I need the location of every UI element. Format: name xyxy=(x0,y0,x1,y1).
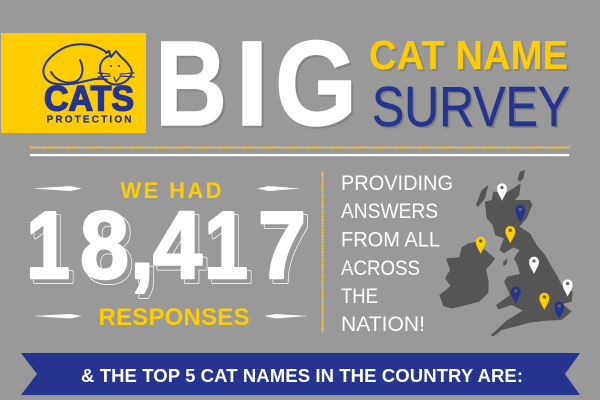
we had label: WE HAD xyxy=(120,178,222,203)
title: BIG xyxy=(155,15,359,153)
text: providing answers: ANSWERS xyxy=(341,199,438,223)
map pins xyxy=(476,183,573,319)
response count: 1 xyxy=(204,192,248,299)
title: BIG: I xyxy=(235,15,269,151)
response count: 4 xyxy=(153,192,202,299)
response count: 7 xyxy=(262,196,310,303)
text: providing answers: FROM ALL xyxy=(341,228,440,252)
banner xyxy=(21,353,580,395)
response count: 1 xyxy=(26,192,70,299)
response count: 1 xyxy=(208,196,252,303)
response count: 1 xyxy=(30,196,74,303)
solid divider xyxy=(30,154,569,156)
response count: 7 xyxy=(262,196,310,303)
response count: 1 xyxy=(30,196,74,303)
title: CAT NAME: CAT NAME xyxy=(371,34,570,80)
vertical dotted divider xyxy=(322,172,324,332)
title: CAT NAME: CAT NAME xyxy=(369,32,568,78)
dotted divider xyxy=(30,146,570,148)
response count: , xyxy=(134,196,158,303)
title: BIG: G xyxy=(277,17,359,153)
response count xyxy=(26,192,310,303)
text: providing answers: THE xyxy=(341,284,378,308)
title: SURVEY: SURVEY xyxy=(372,75,570,139)
logo panel: Cats Protection xyxy=(1,33,146,133)
title: BIG: I xyxy=(237,17,271,153)
banner text: & THE TOP 5 CAT NAMES IN THE COUNTRY ARE: xyxy=(81,365,523,386)
response count: 4 xyxy=(157,196,206,303)
logo subtitle: PROTECTION xyxy=(46,114,132,126)
response count: 1 xyxy=(208,196,252,303)
text: providing answers xyxy=(341,171,453,336)
title: BIG: B xyxy=(157,17,229,153)
decorative flourishes xyxy=(33,186,308,318)
text: providing answers: ACROSS xyxy=(341,256,420,280)
responses label: RESPONSES xyxy=(98,304,250,331)
response count: 8 xyxy=(84,196,133,303)
response count: 8 xyxy=(80,192,129,299)
logo wordmark: CATS xyxy=(44,80,134,118)
title: BIG: G xyxy=(275,15,357,151)
response count: 7 xyxy=(258,192,306,299)
text: providing answers: PROVIDING xyxy=(341,171,453,195)
text: providing answers: NATION! xyxy=(341,312,425,336)
response count: 8 xyxy=(84,196,133,303)
response count: , xyxy=(130,192,154,299)
map: UK and Ireland xyxy=(439,170,573,337)
response count: , xyxy=(134,196,158,303)
response count: 4 xyxy=(157,196,206,303)
icon: sleeping cat xyxy=(43,44,134,85)
title: BIG: B xyxy=(155,15,227,151)
